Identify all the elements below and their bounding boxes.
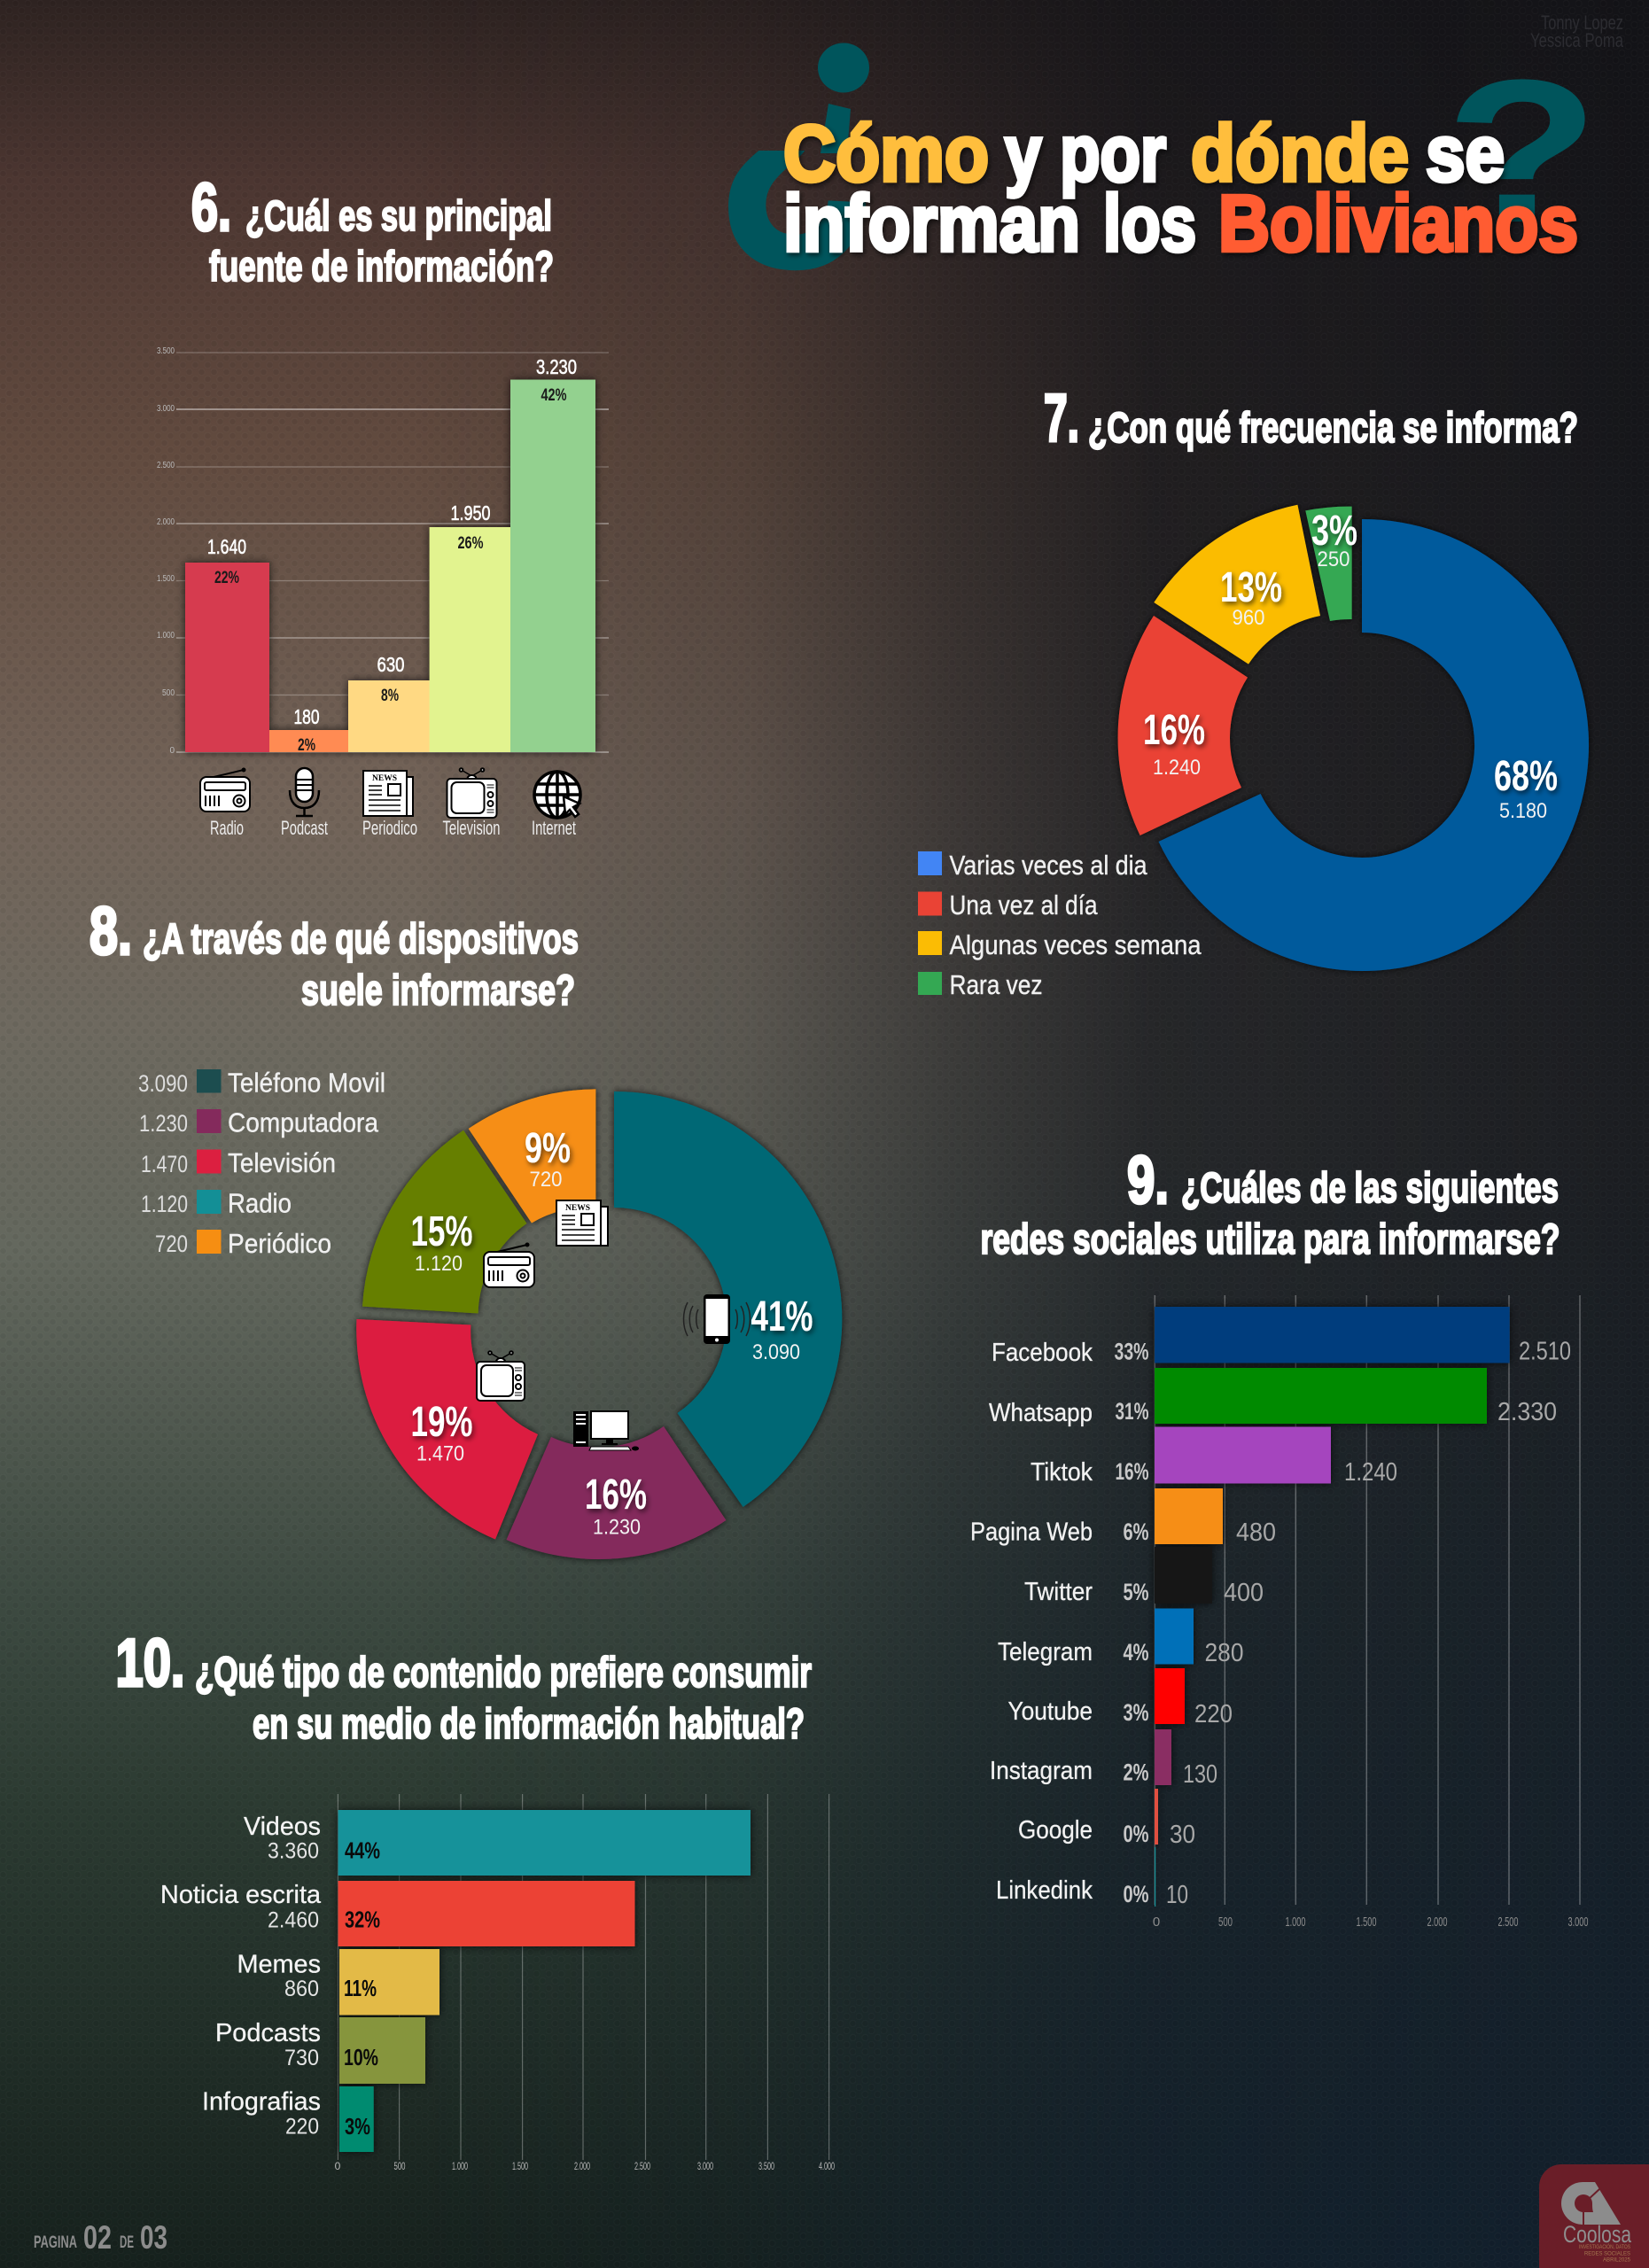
- category labels: Periodico: [362, 817, 417, 839]
- icon: microphone: [290, 768, 319, 816]
- icon: newspaper: [363, 771, 413, 816]
- percentages: 3%: [1124, 1699, 1148, 1726]
- legend: Teléfono Movil: [228, 1067, 385, 1099]
- icon: globe: [534, 772, 580, 818]
- heading 6: 6.: [191, 170, 231, 245]
- heading 8: 8.: [89, 894, 132, 969]
- grid and axis: 1.500: [512, 2160, 528, 2172]
- page number: PAGINA: [34, 2233, 77, 2252]
- network names: Whatsapp: [989, 1399, 1093, 1427]
- category labels: [210, 817, 576, 839]
- donut chart: 1.120: [415, 1252, 463, 1276]
- category values: 730: [284, 2046, 319, 2070]
- heading 10: [115, 1626, 812, 1748]
- legend: 1.120: [141, 1191, 188, 1217]
- heading 8: [89, 894, 579, 1014]
- decorative question mark: ?: [1445, 37, 1599, 265]
- icon: radio: [484, 1244, 534, 1287]
- chart axis and grid: 1.500: [157, 574, 175, 584]
- panel: question 10: [115, 1626, 835, 2172]
- legend: Periódico: [228, 1228, 331, 1259]
- bar values: 1.640: [207, 535, 246, 558]
- title text: se: [1426, 110, 1505, 198]
- category names: Memes: [237, 1951, 321, 1979]
- values: 2.330: [1497, 1398, 1557, 1426]
- category names: Videos: [244, 1813, 321, 1841]
- network names: Instagram: [990, 1757, 1093, 1785]
- category labels: Radio: [210, 817, 244, 839]
- chart axis and grid: 0: [169, 746, 175, 756]
- bar values: 630: [377, 653, 404, 676]
- values: 280: [1205, 1639, 1244, 1667]
- chart axis and grid: 500: [162, 688, 175, 698]
- legend: [138, 1067, 385, 1259]
- grid and axis: 1.000: [1285, 1915, 1306, 1930]
- network names: Twitter: [1024, 1578, 1093, 1606]
- panel: question 6: [157, 170, 609, 839]
- donut chart: 9%: [525, 1125, 571, 1172]
- donut chart: 3.090: [752, 1340, 800, 1364]
- values: 30: [1170, 1821, 1195, 1849]
- panel: question 8: [89, 894, 842, 1559]
- percentages: 33%: [1115, 1338, 1148, 1364]
- percentages: 0%: [1124, 1821, 1148, 1847]
- donut chart: 720: [530, 1168, 562, 1192]
- donut chart: 16%: [585, 1472, 647, 1518]
- grid and axis: [335, 1794, 835, 2172]
- donut chart: [356, 1089, 842, 1559]
- values: 400: [1224, 1579, 1264, 1607]
- network names: Telegram: [998, 1638, 1093, 1666]
- bar values: 3.230: [536, 355, 577, 378]
- values: 10: [1166, 1881, 1188, 1909]
- page number: 02: [83, 2219, 112, 2256]
- donut chart: 41%: [751, 1293, 813, 1340]
- donut chart: 1.230: [593, 1515, 641, 1540]
- percentages: 11%: [344, 1975, 377, 2001]
- bar values: 22%: [214, 569, 239, 587]
- grid and axis: 1.500: [1356, 1915, 1377, 1930]
- grid and axis: 1.000: [452, 2160, 468, 2172]
- heading 7: 7.: [1044, 381, 1079, 456]
- percentages: 31%: [1115, 1398, 1148, 1425]
- bar values: [207, 355, 577, 755]
- icon: newspaper: NEWS: [372, 774, 397, 783]
- bar values: 42%: [541, 386, 567, 405]
- network names: Facebook: [992, 1339, 1093, 1367]
- bar values: 1.950: [450, 501, 491, 524]
- title text: Cómo: [783, 110, 989, 198]
- credits: Tonny Lopez: [1541, 12, 1623, 34]
- icon: television: [477, 1351, 525, 1401]
- bars: [338, 1810, 751, 2152]
- percentages: 2%: [1124, 1759, 1148, 1786]
- bar values: 26%: [457, 534, 484, 553]
- category values: 220: [285, 2114, 319, 2139]
- network names: Pagina Web: [970, 1518, 1093, 1547]
- icon: newspaper: [556, 1200, 608, 1246]
- percentages: 6%: [1124, 1518, 1148, 1545]
- icon: smartphone: [684, 1294, 750, 1344]
- category labels: Television: [443, 817, 500, 839]
- logo caption: REDES SOCIALES: [1584, 2250, 1631, 2257]
- grid and axis: 3.000: [1568, 1915, 1588, 1930]
- donut chart: 16%: [1143, 707, 1205, 754]
- icon: radio: [200, 769, 250, 812]
- network names: Google: [1018, 1816, 1093, 1845]
- grid and axis: 3.500: [758, 2160, 774, 2172]
- title text: dónde: [1191, 110, 1409, 198]
- percentages: [344, 1837, 380, 2140]
- donut chart: 15%: [411, 1208, 473, 1255]
- percentages: 16%: [1115, 1458, 1148, 1485]
- category values: 2.460: [268, 1908, 319, 1933]
- logo caption: ABRIL2025: [1603, 2257, 1630, 2263]
- donut chart: 1.240: [1153, 756, 1201, 780]
- icon: newspaper: NEWS: [565, 1204, 590, 1213]
- donut chart: 5.180: [1499, 799, 1547, 823]
- grid and axis: 2.000: [574, 2160, 590, 2172]
- chart axis and grid: 3.500: [157, 346, 175, 356]
- bar values: 8%: [381, 687, 399, 705]
- grid and axis: 0: [335, 2160, 341, 2172]
- donut chart: 250: [1317, 548, 1350, 571]
- donut chart: 68%: [1494, 753, 1558, 800]
- heading 6: ¿Cuál es su principal: [245, 193, 552, 240]
- category labels: Podcast: [281, 817, 328, 839]
- grid and axis: 0: [1153, 1915, 1160, 1930]
- category labels: Internet: [532, 817, 576, 839]
- heading 8: suele informarse?: [301, 967, 575, 1014]
- heading 6: [191, 170, 554, 291]
- values: 480: [1236, 1518, 1276, 1547]
- values: [1166, 1338, 1571, 1909]
- logo caption: [1579, 2242, 1631, 2263]
- legend: Rara vez: [950, 969, 1042, 1000]
- donut chart: 960: [1232, 606, 1265, 630]
- values: 130: [1183, 1760, 1217, 1789]
- title text: informan: [783, 180, 1080, 268]
- title block: [728, 43, 1584, 271]
- legend: Radio: [228, 1187, 292, 1219]
- decorative inverted question mark: [728, 43, 869, 271]
- chart axis and grid: 1.000: [157, 631, 175, 641]
- percentages: [1115, 1338, 1148, 1907]
- legend: [918, 850, 1202, 1000]
- heading 10: 10.: [115, 1626, 184, 1701]
- heading 8: ¿A través de qué dispositivos: [143, 916, 579, 963]
- values: 1.240: [1344, 1458, 1397, 1487]
- category names: Podcasts: [215, 2019, 321, 2047]
- category values: 3.360: [268, 1839, 319, 1864]
- legend: Computadora: [228, 1107, 379, 1138]
- category names: [160, 1813, 322, 2116]
- title text: y por: [1005, 110, 1166, 198]
- credits: [1530, 12, 1624, 51]
- heading 6: fuente de información?: [209, 244, 554, 291]
- percentages: 3%: [345, 2113, 370, 2140]
- grid and axis: 3.000: [697, 2160, 713, 2172]
- network names: [970, 1339, 1093, 1905]
- panel: question 9: [970, 1143, 1588, 1930]
- logo caption: INVESTIGACIÓN, DATOS: [1579, 2242, 1631, 2250]
- network names: Youtube: [1008, 1697, 1093, 1726]
- heading 9: [980, 1143, 1560, 1263]
- grid and axis: 500: [393, 2160, 406, 2172]
- chart axis and grid: 2.500: [157, 461, 175, 470]
- title text: los: [1103, 180, 1196, 268]
- page number: 03: [140, 2219, 167, 2256]
- page number: DE: [120, 2233, 134, 2252]
- bar values: 180: [294, 705, 319, 728]
- legend: Varias veces al dia: [950, 850, 1147, 881]
- icon: television: [447, 768, 496, 818]
- grid and axis: 2.500: [634, 2160, 650, 2172]
- chart axis and grid: [157, 346, 609, 756]
- bars: [1155, 1307, 1510, 1907]
- title text: [783, 110, 1578, 268]
- chart axis and grid: 3.000: [157, 404, 175, 414]
- heading 10: en su medio de información habitual?: [253, 1701, 805, 1748]
- legend: Televisión: [228, 1147, 336, 1178]
- heading 9: 9.: [1127, 1143, 1169, 1218]
- values: 2.510: [1519, 1338, 1571, 1366]
- category names: Noticia escrita: [160, 1881, 322, 1909]
- category values: 860: [284, 1977, 319, 2001]
- grid and axis: 2.500: [1497, 1915, 1519, 1930]
- percentages: 5%: [1124, 1579, 1148, 1605]
- legend: 720: [155, 1231, 188, 1257]
- legend: 1.230: [139, 1110, 188, 1137]
- logo mark: [1561, 2182, 1621, 2225]
- category names: Infografias: [202, 2087, 321, 2116]
- logo wordmark: Coolosa: [1563, 2221, 1632, 2248]
- donut chart: 13%: [1220, 564, 1282, 611]
- category values: [268, 1839, 319, 2139]
- grid and axis: [1153, 1295, 1588, 1930]
- heading 7: [1044, 381, 1578, 456]
- bar values: 2%: [298, 736, 315, 755]
- donut chart: 1.470: [416, 1442, 464, 1465]
- logo: Coolosa: [1539, 2164, 1649, 2268]
- bars: [185, 379, 595, 752]
- percentages: 4%: [1124, 1639, 1148, 1666]
- legend: 3.090: [138, 1070, 188, 1097]
- chart axis and grid: 2.000: [157, 517, 175, 527]
- grid and axis: 2.000: [1427, 1915, 1448, 1930]
- page number: [34, 2219, 167, 2256]
- icon: desktop computer: [573, 1411, 639, 1451]
- grid and axis: 500: [1218, 1915, 1233, 1930]
- donut chart: 3%: [1311, 508, 1357, 555]
- donut chart: [1118, 505, 1589, 971]
- percentages: 10%: [344, 2044, 378, 2070]
- percentages: 44%: [345, 1837, 380, 1864]
- heading 10: ¿Qué tipo de contenido prefiere consumir: [195, 1650, 812, 1697]
- grid and axis: 4.000: [819, 2160, 835, 2172]
- legend: Algunas veces semana: [950, 929, 1202, 960]
- title text: Bolivianos: [1218, 180, 1578, 268]
- network names: Tiktok: [1031, 1458, 1093, 1487]
- percentages: 0%: [1124, 1881, 1148, 1907]
- legend: 1.470: [141, 1151, 188, 1177]
- network names: Linkedink: [996, 1876, 1093, 1905]
- percentages: 32%: [345, 1907, 380, 1933]
- values: 220: [1194, 1700, 1233, 1728]
- panel: question 7: [918, 381, 1589, 1000]
- legend: Una vez al día: [950, 889, 1098, 920]
- donut chart: 19%: [411, 1399, 473, 1446]
